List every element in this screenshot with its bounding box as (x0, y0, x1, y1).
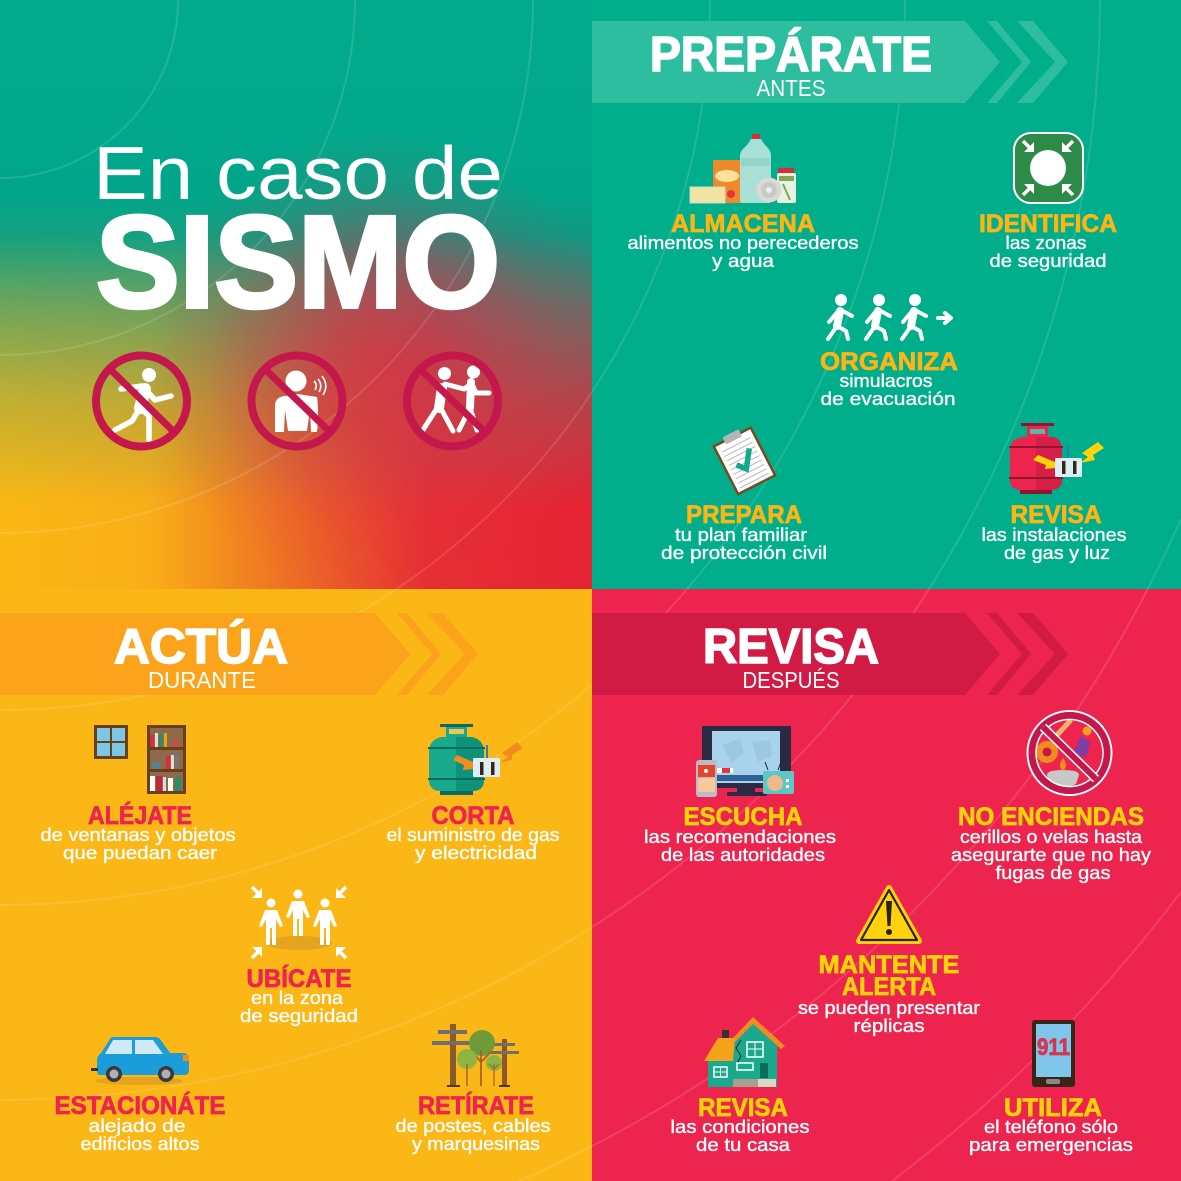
item: retírate: RETÍRATE (418, 1091, 534, 1120)
item: identifica: IDENTIFICA (979, 210, 1117, 238)
item: corta: y electricidad (415, 843, 537, 863)
icon: casa agrietada (704, 1017, 785, 1087)
panel: antes background (592, 0, 1181, 589)
item: no enciendas (951, 711, 1151, 883)
panel: despues background (592, 589, 1181, 1181)
panel: banner revisa (592, 613, 1068, 695)
icon: no gritar (252, 356, 342, 446)
icon: ventana y librero (94, 725, 186, 794)
title: En caso de (93, 131, 503, 215)
item: corta: el suministro de gas (386, 825, 560, 845)
panel: banner actúa: DURANTE (148, 667, 256, 693)
panel: banner revisa: REVISA (703, 620, 879, 674)
icon: no empujar (407, 356, 498, 446)
panel: banner actúa (0, 613, 478, 695)
item: aléjate: que puedan caer (63, 843, 217, 863)
icon: portapapeles (711, 423, 777, 496)
panel: banner prepárate (592, 21, 1068, 103)
item: corta: CORTA (432, 802, 514, 830)
item: organiza (820, 294, 958, 409)
item: almacena (628, 134, 858, 271)
item: escucha (644, 726, 836, 865)
icon: postes y árboles (432, 1024, 519, 1087)
item: revisa casa (670, 1017, 810, 1155)
item: mantente alerta (798, 888, 980, 1036)
item: revisa casa: de tu casa (696, 1135, 791, 1155)
item: utiliza: UTILIZA (1004, 1094, 1102, 1122)
item: mantente alerta: MANTENTE (818, 951, 960, 979)
panel: title background gradient (0, 0, 592, 589)
icon: teléfono 911 (1032, 1020, 1075, 1087)
icon: tanque de gas y enchufe (1009, 423, 1104, 494)
item: utiliza: para emergencias (969, 1135, 1133, 1155)
item: revisa casa: las condiciones (670, 1117, 810, 1137)
item: almacena: ALMACENA (671, 210, 815, 238)
item: escucha: ESCUCHA (684, 803, 802, 831)
item: no enciendas: NO ENCIENDAS (958, 803, 1144, 831)
item: no enciendas: cerillos o velas hasta (960, 827, 1143, 847)
item: no enciendas: asegurarte que no hay (951, 845, 1151, 865)
item: revisa instalaciones: de gas y luz (1004, 543, 1110, 563)
icon: personas en punto de reunión (252, 887, 346, 958)
item: prepara: tu plan familiar (675, 525, 807, 545)
item: organiza: ORGANIZA (820, 348, 958, 376)
item: aléjate: ALÉJATE (88, 801, 192, 830)
item: organiza: de evacuación (820, 389, 956, 409)
panel: banner prepárate: ANTES (756, 75, 826, 101)
item: estaciónate: alejado de (88, 1116, 186, 1136)
panel: banner revisa: DESPUÉS (742, 667, 840, 693)
item: utiliza (969, 1020, 1133, 1155)
item: no enciendas: fugas de gas (996, 863, 1110, 883)
icon: personas evacuando (828, 294, 951, 339)
item: aléjate: de ventanas y objetos (40, 825, 236, 845)
item: ubícate (240, 887, 358, 1026)
icon: teléfono 911: 911 (1037, 1034, 1070, 1061)
icon: automóvil (91, 1037, 189, 1085)
item: revisa instalaciones (982, 423, 1126, 563)
item: retírate: de postes, cables (396, 1116, 550, 1136)
icon: triángulo de advertencia (859, 888, 919, 941)
item: estaciónate (54, 1037, 226, 1154)
item: revisa instalaciones: las instalaciones (982, 525, 1126, 545)
item: estaciónate: ESTACIONÁTE (54, 1091, 226, 1120)
item: almacena: alimentos no perecederos (628, 233, 858, 253)
icon: no correr (96, 356, 187, 446)
title: SISMO (96, 188, 500, 335)
item: aléjate (40, 725, 236, 863)
item: identifica: las zonas (1006, 233, 1086, 253)
item: prepara: PREPARA (686, 501, 802, 529)
item: prepara: de protección civil (661, 543, 827, 563)
item: estaciónate: edificios altos (80, 1134, 200, 1154)
item: identifica (979, 133, 1117, 271)
item: organiza: simulacros (840, 371, 932, 391)
item: identifica: de seguridad (990, 251, 1106, 271)
title (93, 131, 503, 335)
icon: televisión, teléfono y radio (696, 726, 794, 797)
item: retírate (396, 1024, 550, 1154)
item: escucha: las recomendaciones (644, 827, 836, 847)
icon: tanque verde y enchufe (428, 724, 523, 795)
item: escucha: de las autoridades (661, 845, 825, 865)
item: ubícate: en la zona (251, 988, 344, 1008)
item: prepara (661, 423, 827, 563)
item: revisa instalaciones: REVISA (1010, 501, 1102, 529)
icon: zona de seguridad (1014, 133, 1083, 203)
item: retírate: y marquesinas (412, 1134, 540, 1154)
icon: alimentos y agua (690, 134, 796, 203)
item: mantente alerta: se pueden presentar (798, 998, 980, 1018)
icon: prohibido encender velas (1028, 711, 1112, 795)
item: mantente alerta: réplicas (854, 1016, 924, 1036)
item: corta (386, 724, 560, 863)
item: utiliza: el teléfono sólo (984, 1117, 1118, 1137)
item: ubícate: de seguridad (240, 1006, 358, 1026)
item: almacena: y agua (712, 251, 775, 271)
item: mantente alerta: ALERTA (842, 973, 936, 1001)
panel: durante background (0, 589, 592, 1181)
item: ubícate: UBÍCATE (246, 964, 352, 993)
item: revisa casa: REVISA (698, 1094, 788, 1122)
panel: banner prepárate: PREPÁRATE (650, 28, 932, 82)
panel: banner actúa: ACTÚA (114, 619, 288, 674)
